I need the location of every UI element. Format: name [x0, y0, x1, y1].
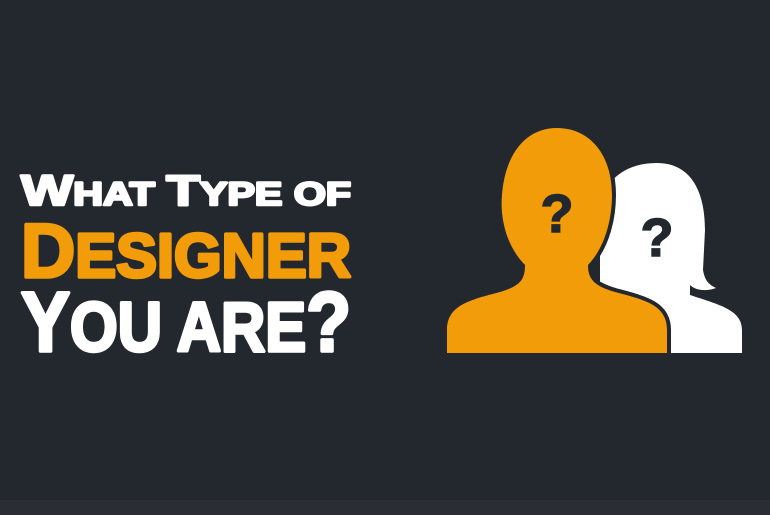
icon: woman silhouette: ? — [640, 208, 674, 268]
title line 1: W HAT TYPE OF — [21, 167, 351, 215]
title — [21, 167, 351, 369]
title line 3: YOU ARE? — [21, 275, 351, 369]
icon: two person silhouettes — [447, 128, 742, 353]
icon: man silhouette — [447, 128, 667, 353]
title line 2: DESIGNER — [21, 209, 351, 294]
icon: woman silhouette — [600, 163, 742, 353]
icon: man silhouette: ? — [540, 184, 574, 244]
